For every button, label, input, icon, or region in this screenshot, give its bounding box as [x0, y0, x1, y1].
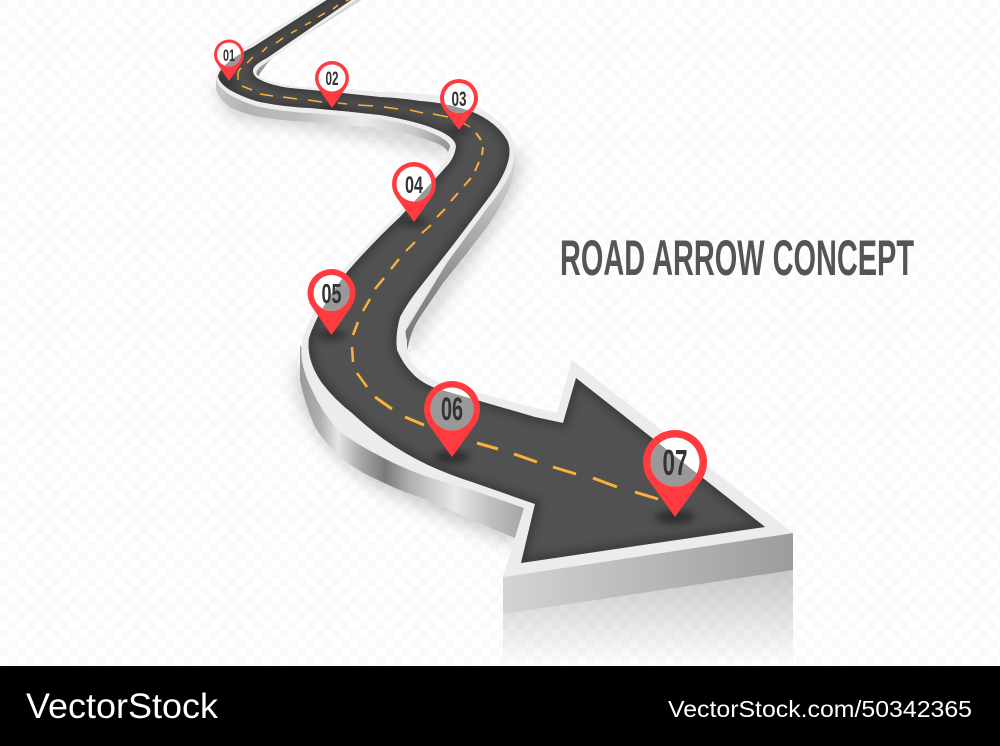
- watermark bar: [0, 666, 1000, 746]
- map pin 03: 03: [452, 87, 467, 111]
- dashed yellow centre line: [238, 0, 658, 499]
- watermark logo text: VectorStock: [26, 687, 219, 726]
- map pin 05: [308, 269, 356, 340]
- asphalt surface: [218, 0, 765, 563]
- floor reflection below arrow head: [503, 568, 793, 666]
- road side walls: [216, 0, 793, 614]
- map pin 07: [643, 430, 707, 524]
- wall: front of segment 01 to 03: [216, 78, 452, 152]
- road surface with white rim: [216, 0, 793, 577]
- wall: outer right side of segment 03 to 05: [400, 150, 515, 352]
- wall: main front curve: [300, 345, 524, 538]
- asphalt edge shading: [218, 0, 765, 563]
- white rim of road: [216, 0, 793, 577]
- wall: top inner bend: [254, 0, 368, 78]
- map pin 07: 07: [662, 442, 688, 483]
- map pin 02: 02: [326, 69, 338, 90]
- soft shadow under the road: [212, 85, 530, 545]
- map pin 03: [440, 79, 478, 134]
- map pin 05: 05: [322, 278, 342, 309]
- map pin 06: [424, 381, 480, 463]
- map pin 06: 06: [441, 391, 463, 427]
- map pin 04: [392, 162, 436, 226]
- map pin 02: [315, 61, 349, 112]
- map pin 04: 04: [405, 172, 423, 199]
- watermark url text: VectorStock.com/50342365: [668, 696, 972, 722]
- map pin 01: [214, 40, 244, 84]
- wall: arrow head front: [503, 533, 793, 614]
- map pin 01: 01: [223, 46, 235, 65]
